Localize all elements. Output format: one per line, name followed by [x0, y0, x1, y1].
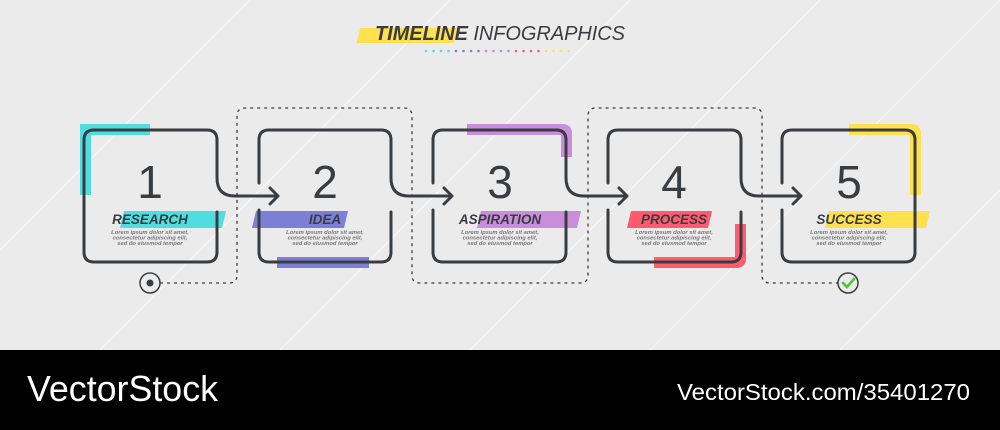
lorem text: consectetur adipiscing elit,	[812, 236, 887, 242]
labels: PROCESS	[641, 212, 707, 227]
labels: ASPIRATION	[458, 212, 541, 227]
footer bar: VectorStock.com/35401270	[677, 379, 970, 405]
labels: RESEARCH	[112, 212, 188, 227]
lorem text: Lorem ipsum dolor sit amet,	[461, 230, 539, 236]
lorem text: Lorem ipsum dolor sit amet,	[286, 230, 364, 236]
label bars	[120, 211, 930, 228]
labels: SUCCESS	[816, 212, 882, 227]
lorem text: sed do eiusmod tempor	[467, 241, 533, 247]
icon: start circle	[140, 273, 160, 293]
lorem text: sed do eiusmod tempor	[292, 241, 358, 247]
labels: IDEA	[309, 212, 341, 227]
numbers: 2	[312, 156, 338, 208]
lorem text: consectetur adipiscing elit,	[288, 236, 363, 242]
icon: check	[838, 273, 858, 293]
dotted connector path	[160, 108, 838, 283]
lorem text: sed do eiusmod tempor	[117, 241, 183, 247]
box outlines and arrows	[84, 130, 915, 262]
title: TIMELINE INFOGRAPHICS	[375, 23, 626, 45]
numbers: 4	[661, 156, 687, 208]
lorem text	[111, 230, 888, 247]
title	[356, 23, 626, 52]
accents	[80, 124, 921, 268]
lorem text: sed do eiusmod tempor	[641, 241, 707, 247]
footer bar	[0, 350, 1000, 430]
numbers	[137, 156, 862, 208]
lorem text: sed do eiusmod tempor	[816, 241, 882, 247]
footer bar: VectorStock	[27, 368, 219, 409]
lorem text: Lorem ipsum dolor sit amet,	[635, 230, 713, 236]
numbers: 1	[137, 156, 163, 208]
numbers: 3	[487, 156, 513, 208]
lorem text: Lorem ipsum dolor sit amet,	[810, 230, 888, 236]
lorem text: consectetur adipiscing elit,	[463, 236, 538, 242]
labels	[112, 212, 882, 227]
lorem text: consectetur adipiscing elit,	[113, 236, 188, 242]
numbers: 5	[836, 156, 862, 208]
lorem text: Lorem ipsum dolor sit amet,	[111, 230, 189, 236]
lorem text: consectetur adipiscing elit,	[637, 236, 712, 242]
